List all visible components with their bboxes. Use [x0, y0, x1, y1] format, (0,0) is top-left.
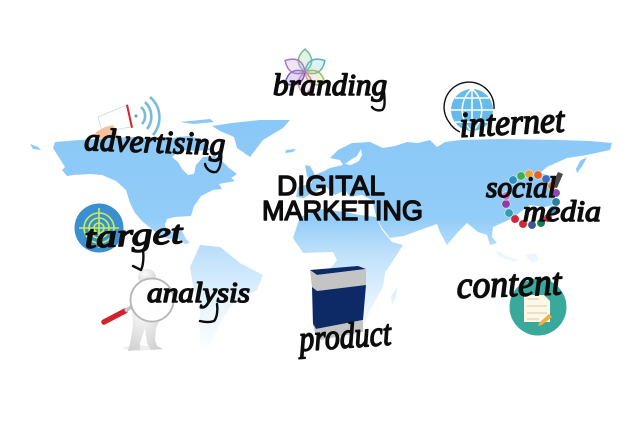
icon: target	[74, 204, 124, 252]
petal pink	[298, 72, 312, 95]
icon: content document	[510, 278, 566, 336]
document sheet	[524, 295, 550, 322]
document lines	[527, 299, 547, 319]
box top	[310, 266, 366, 275]
figure head	[138, 269, 156, 285]
icon: megaphone with hand	[95, 97, 159, 138]
globe disc	[451, 89, 493, 131]
box blue panel	[312, 285, 366, 329]
map: Eurasia	[296, 139, 612, 245]
target crosshair	[79, 208, 119, 248]
globe grid	[451, 89, 493, 131]
petal purple	[282, 55, 308, 78]
sound waves	[141, 97, 159, 135]
map: Kamchatka	[576, 157, 587, 173]
icon: product box	[310, 266, 366, 340]
teal disc	[510, 278, 566, 336]
megaphone cone	[98, 105, 131, 132]
label: branding: branding	[273, 67, 387, 102]
label: analysis	[147, 277, 250, 322]
icon: globe	[444, 82, 494, 132]
red rim	[126, 104, 133, 128]
map: Madagascar	[391, 287, 397, 306]
pencil	[538, 314, 552, 326]
hand	[95, 125, 118, 138]
label: content: content	[456, 261, 564, 307]
pen	[551, 172, 563, 188]
icon: figure with magnifying glass	[104, 269, 174, 351]
map: arctic islands	[180, 119, 296, 182]
target disc	[74, 204, 124, 252]
magnifier lens	[130, 278, 174, 322]
map: South America	[190, 245, 263, 350]
label: product: product	[295, 313, 393, 359]
map: Baltic sea	[345, 149, 362, 165]
petal green	[298, 49, 312, 72]
magnifier handle	[104, 311, 125, 322]
map: Greenland	[212, 120, 290, 157]
petal teal	[302, 55, 328, 78]
label: analysis: analysis	[147, 277, 250, 309]
label: target: target	[83, 214, 185, 255]
sound dot	[134, 114, 138, 118]
map: Great Britain	[305, 165, 317, 182]
map: North America	[53, 136, 237, 244]
box lower band	[313, 320, 363, 340]
magnifier collar	[125, 306, 133, 311]
box grey band	[310, 269, 366, 291]
social bubbles	[502, 170, 560, 229]
globe ring	[444, 82, 494, 132]
petal olive	[302, 66, 328, 89]
title line 2: MARKETING	[262, 195, 423, 226]
label: media: media	[523, 195, 601, 228]
label: advertising: advertising	[84, 121, 226, 162]
title: digital marketing	[262, 170, 423, 226]
world map	[30, 119, 612, 350]
map: Alaska islet	[30, 144, 41, 150]
title line 1: DIGITAL	[277, 170, 385, 201]
figure shadow	[123, 346, 159, 350]
label: internet: internet	[458, 100, 566, 145]
label: target	[83, 214, 185, 270]
icon: social media ring	[502, 170, 563, 229]
map: Indonesia and Australia	[495, 250, 565, 312]
map: Africa	[293, 209, 403, 340]
label: social: social	[486, 171, 556, 204]
figure body	[128, 294, 163, 351]
icon: branding flower	[282, 49, 328, 95]
petal violet	[282, 66, 308, 89]
